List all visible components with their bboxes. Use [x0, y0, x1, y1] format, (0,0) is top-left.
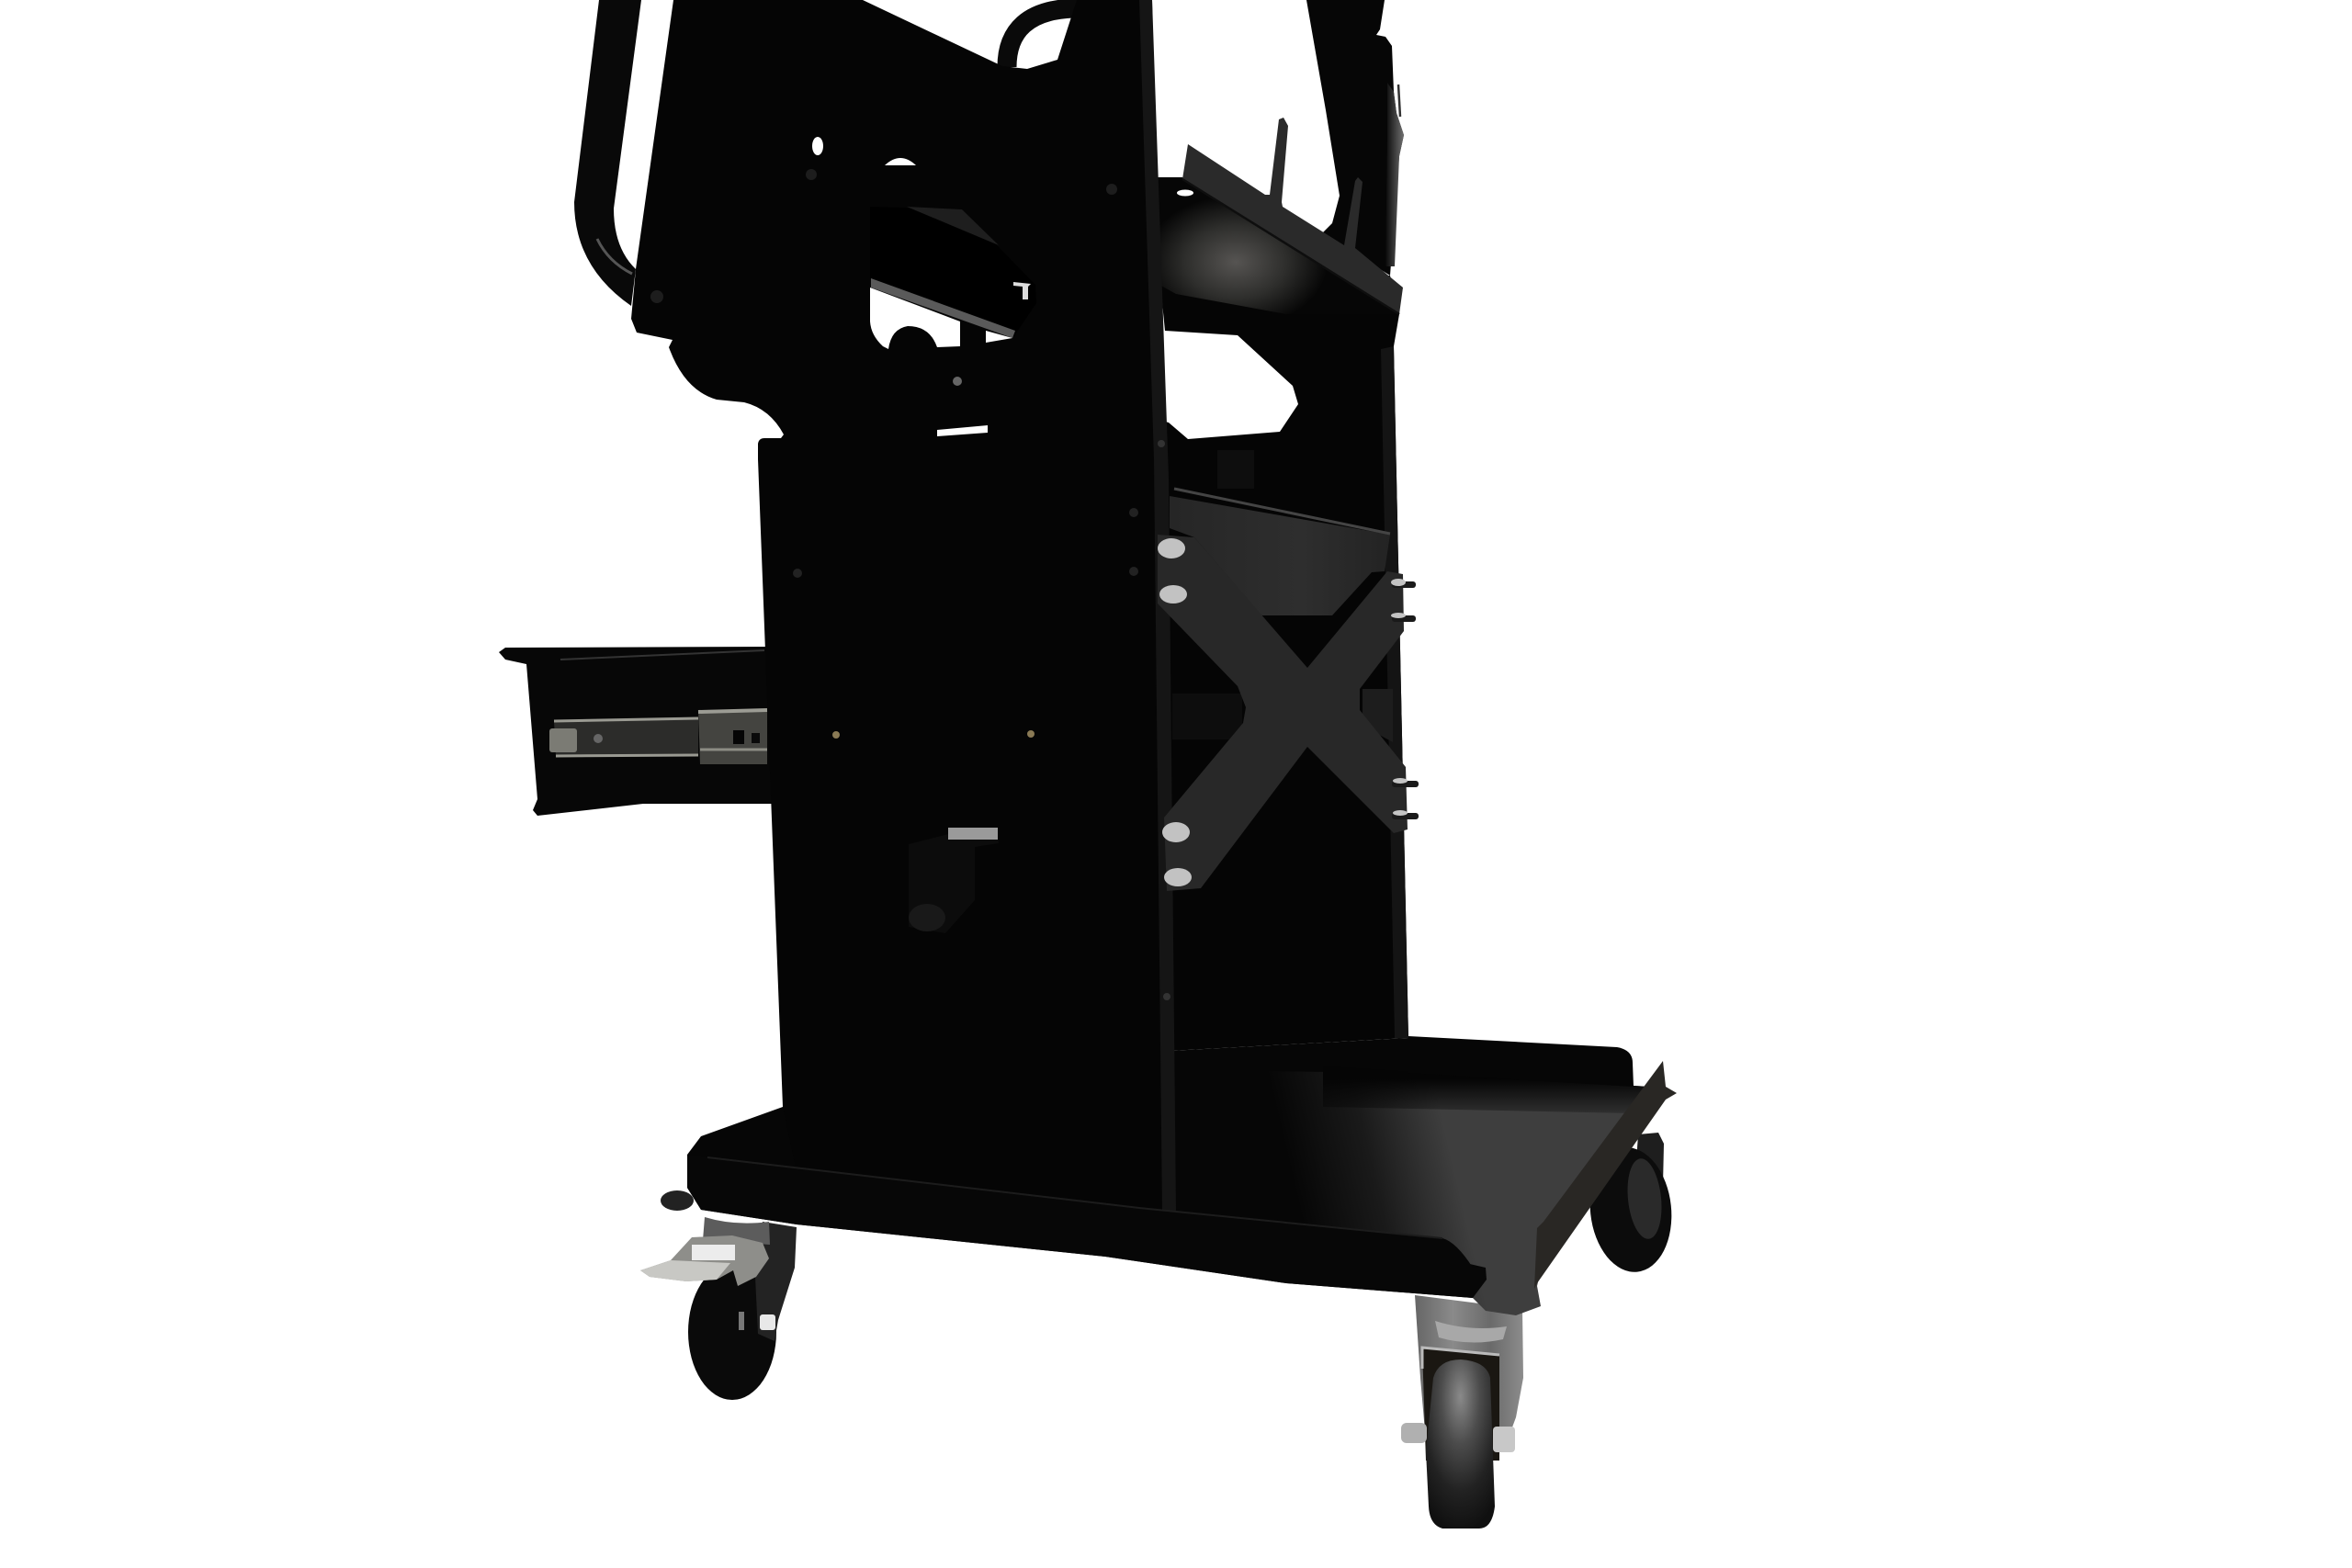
panel fasteners: [650, 169, 1170, 1000]
top chip: [885, 158, 916, 165]
tyre: [688, 1264, 776, 1400]
post right edge strip: [1381, 346, 1408, 1038]
rear lip: [1408, 1036, 1634, 1087]
white view through: [870, 288, 960, 349]
lip top edge highlight: [707, 1157, 1442, 1238]
upper tray: [1158, 118, 1403, 314]
slide inner rail: [554, 718, 698, 756]
shelf rim: [1174, 489, 1390, 534]
left bolts: [1158, 538, 1192, 886]
drawer: [499, 647, 772, 816]
hook above shelf: [1217, 450, 1254, 489]
base platform: [687, 1036, 1677, 1315]
flange crease: [1182, 179, 1399, 314]
bowl slot: [1177, 189, 1193, 197]
fork: [755, 1222, 797, 1341]
tray bowl: [1158, 177, 1399, 314]
swivel highlight: [1435, 1321, 1507, 1343]
front lip: [687, 1155, 1487, 1298]
brake pad tab: [661, 1190, 694, 1211]
front left wheel: [640, 1217, 797, 1400]
fork highlight: [760, 1314, 775, 1330]
platform deck: [1185, 1070, 1649, 1315]
torch hook on panel: [909, 828, 999, 933]
handle tube: [574, 0, 641, 306]
fork rim: [1422, 1348, 1499, 1369]
deck rear shadow band: [1323, 1066, 1649, 1113]
lower slit: [937, 425, 988, 436]
arm edge sheen: [1385, 83, 1404, 266]
tray flange with prongs: [1182, 118, 1403, 314]
brake lever: [640, 1235, 769, 1286]
front right wheel: [1401, 1295, 1523, 1529]
right post: [1153, 276, 1408, 1052]
hinge plate bolt: [953, 377, 962, 386]
grey bar: [871, 278, 1015, 338]
slide outer sleeve: [698, 709, 767, 764]
x cross brace: [1158, 535, 1408, 891]
rear upright arm: [1306, 0, 1404, 276]
base rear wall and underside: [687, 1038, 1488, 1298]
side lip: [1534, 1061, 1677, 1289]
lower shelf: [1170, 450, 1390, 615]
bearing: [703, 1217, 770, 1245]
right bolts: [1392, 581, 1419, 819]
tyre: [1426, 1359, 1495, 1529]
recess: [870, 207, 1036, 337]
top ring handle: [1007, 8, 1107, 67]
panel window: [812, 137, 1036, 436]
arm slot: [1398, 85, 1400, 117]
rear right wheel: [1584, 1133, 1678, 1276]
recess sheen: [907, 207, 999, 245]
tube highlight: [597, 239, 632, 274]
brace bolts: [1158, 538, 1419, 886]
axle nuts: [1401, 1423, 1427, 1443]
side panel and rear box: [631, 0, 1173, 1217]
swivel housing: [1415, 1295, 1523, 1442]
fork opening: [1422, 1348, 1499, 1461]
upper oval hole: [812, 137, 823, 155]
panel side flange: [1139, 0, 1176, 1213]
drawer slide behind brace: [1172, 689, 1393, 742]
slide end clip: [549, 728, 577, 752]
drawer rim line: [560, 650, 764, 660]
small tick: [1013, 282, 1031, 299]
